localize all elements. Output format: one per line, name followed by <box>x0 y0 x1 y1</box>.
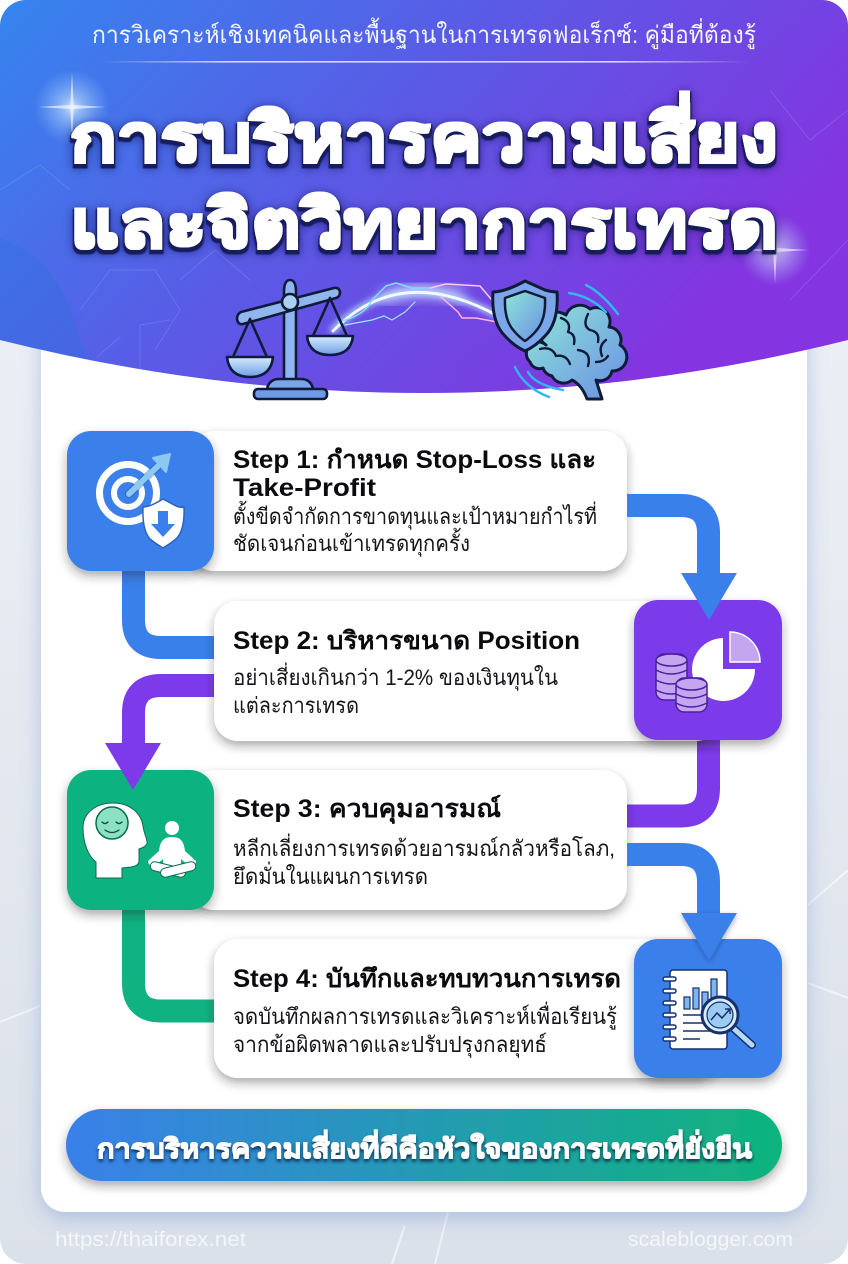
step 4 text: Step 4: บันทึกและทบทวนการเทรด <box>233 965 621 993</box>
divider under subtitle <box>100 61 750 63</box>
connector: purple right <box>620 735 708 816</box>
sparkle left <box>38 72 106 140</box>
title: และจิตวิทยาการเทรด <box>70 187 778 261</box>
step 2 text: Step 2: บริหารขนาด Position <box>233 627 580 655</box>
callout banner <box>66 1109 782 1181</box>
footer left url: https://thaiforex.net <box>55 1229 246 1251</box>
arrowhead: into step 2 <box>681 573 737 620</box>
title <box>70 91 778 261</box>
step 3 text: ยึดมั่นในแผนการเทรด <box>233 861 428 889</box>
icon: shield and brain <box>493 281 627 399</box>
arrowhead: into step 3 <box>105 743 161 790</box>
lightning arc <box>333 283 498 331</box>
connector: step 2 to step 3 <box>134 686 225 750</box>
step 4 card <box>214 939 720 1078</box>
footer right url: scaleblogger.com <box>628 1229 793 1251</box>
step 2 card <box>214 601 720 741</box>
connector: step 3 arrow to step 4 <box>627 854 708 925</box>
step 3 card <box>190 770 627 910</box>
step 4 text: จดบันทึกผลการเทรดและวิเคราะห์เพื่อเรียนรู้ <box>233 1001 617 1030</box>
connector: step 1 to step 2 <box>134 565 225 648</box>
icon: balance scale <box>227 280 353 399</box>
step 2 text: แต่ละการเทรด <box>233 693 359 718</box>
page background <box>0 340 848 1264</box>
step 1 text: ชัดเจนก่อนเข้าเทรดทุกครั้ง <box>233 528 470 557</box>
step 2 text <box>233 627 580 718</box>
step 1 text: Step 1: กำหนด Stop-Loss และ <box>233 446 596 474</box>
connector: step 1 arrow to step 2 <box>627 506 708 585</box>
connector: step 3 to step 4 <box>134 905 225 1011</box>
step 3 text <box>233 794 615 889</box>
step 3 text: Step 3: ควบคุมอารมณ์ <box>233 794 501 825</box>
step 4 text: จากข้อผิดพลาดและปรับปรุงกลยุทธ์ <box>233 1032 547 1058</box>
icon tile: step 3 calm mind <box>67 770 214 910</box>
step 1 card <box>190 431 627 571</box>
header banner <box>0 0 848 393</box>
icon tile: step 4 notebook and magnifier <box>634 939 782 1078</box>
step 2 text: อย่าเสี่ยงเกินกว่า 1-2% ของเงินทุนใน <box>233 662 558 691</box>
step 1 text: Take-Profit <box>233 474 377 502</box>
step 1 text <box>233 446 597 557</box>
step 1 text: ตั้งขีดจำกัดการขาดทุนและเป้าหมายกำไรที่ <box>233 501 597 530</box>
subtitle: การวิเคราะห์เชิงเทคนิคและพื้นฐานในการเทรดฟอเร็กซ์: คู่มือที่ต้องรู้ <box>92 17 756 50</box>
sparkle right <box>743 217 808 284</box>
icon tile: step 2 pie and coins <box>634 600 782 740</box>
callout banner: การบริหารความเสี่ยงที่ดีคือหัวใจของการเทรดที่ยั่งยืน <box>97 1129 753 1164</box>
step 3 text: หลีกเลี่ยงการเทรดด้วยอารมณ์กลัวหรือโลภ, <box>233 833 615 861</box>
arrowhead: into step 4 <box>681 913 737 960</box>
panel: white content card <box>41 300 807 1212</box>
icon tile: step 1 target and shield <box>67 431 214 571</box>
step 4 text <box>233 965 621 1058</box>
title: การบริหารความเสี่ยง <box>70 91 778 175</box>
